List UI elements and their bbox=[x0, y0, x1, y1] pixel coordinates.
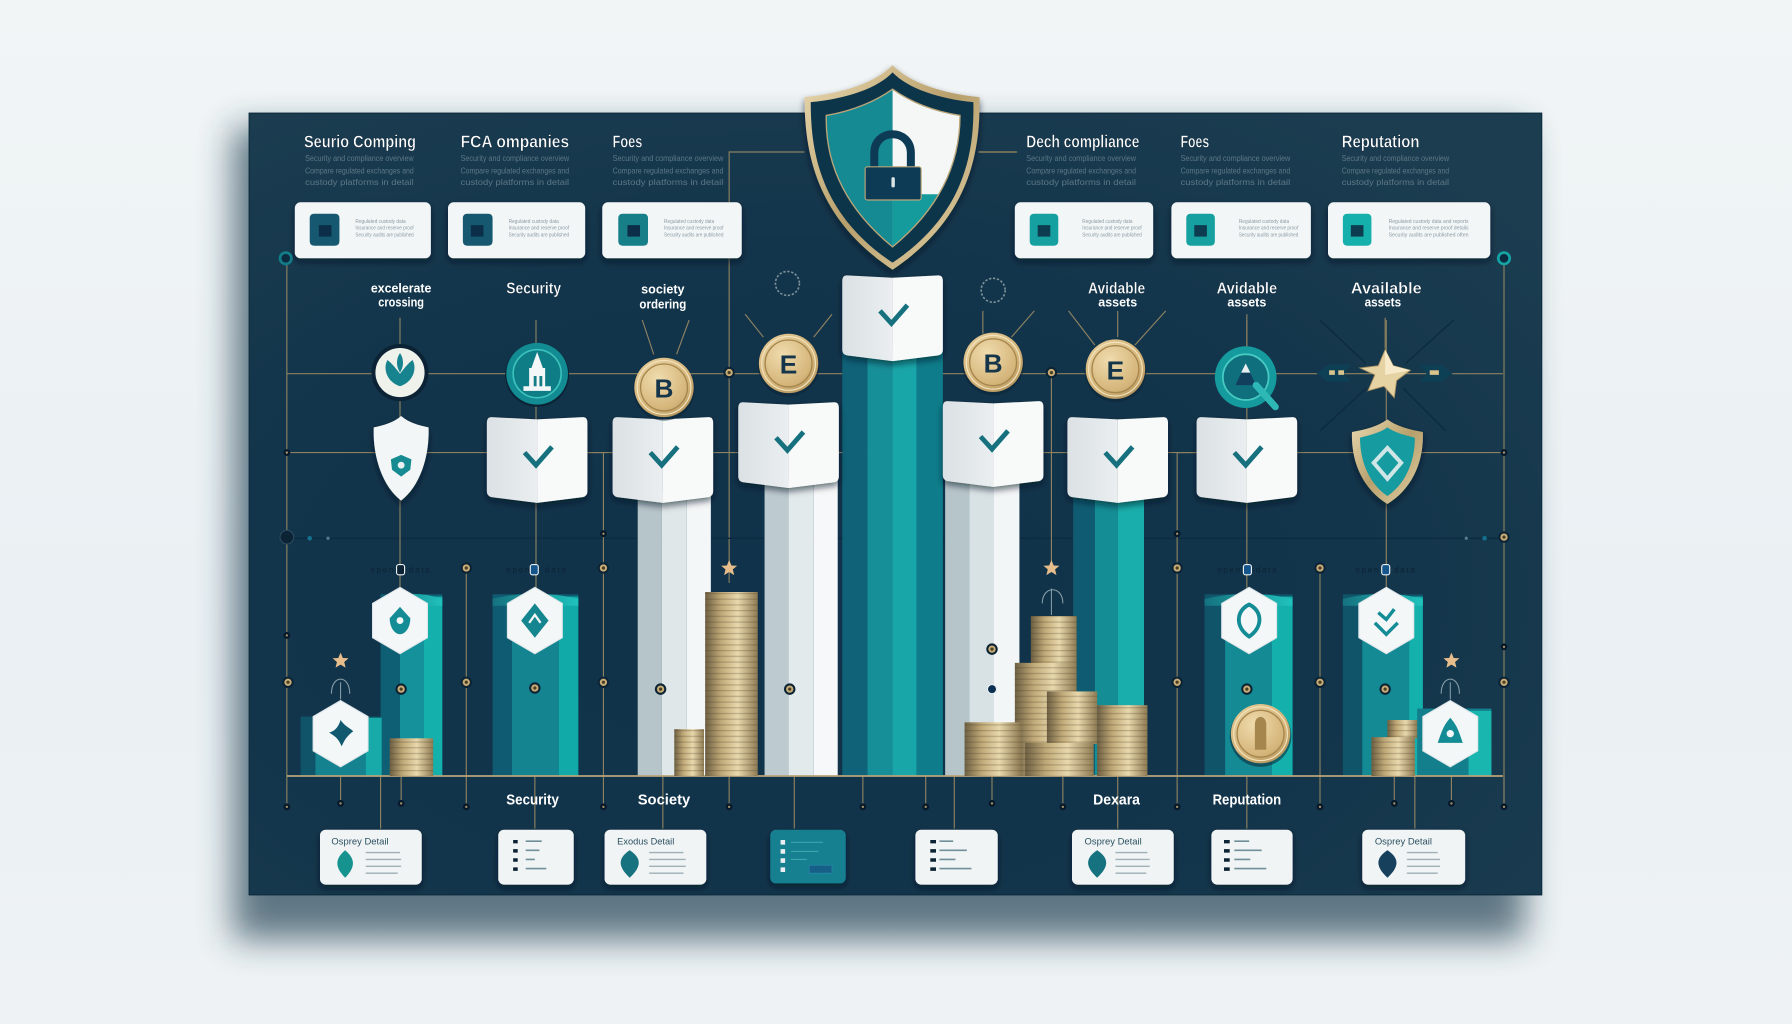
lower bar B bbox=[493, 594, 578, 776]
top card 6: Regulated custody data and reports bbox=[1389, 219, 1469, 225]
connector grid lines bbox=[287, 152, 1504, 829]
panel shadow bbox=[233, 128, 1525, 939]
coin stack A bbox=[390, 738, 433, 776]
icon: gold star bbox=[1360, 350, 1410, 398]
heading: Fees right: Security and compliance overview bbox=[1181, 153, 1291, 163]
top card 6: Security audits are published often bbox=[1389, 233, 1469, 239]
gold connector dots bbox=[282, 367, 1510, 695]
small bar right bbox=[1417, 709, 1491, 776]
bottom card 3: Exodus Detail bbox=[617, 837, 674, 847]
centre teal bar bbox=[842, 349, 943, 776]
heading: Seurio Comping: Seurio Comping bbox=[304, 131, 416, 151]
bottom card 4 teal bbox=[770, 830, 846, 883]
heading: Seurio Comping: custody platforms in detail bbox=[305, 177, 414, 187]
small bar left bbox=[301, 717, 382, 776]
check box 2 bbox=[613, 417, 713, 503]
heading: Fees left bbox=[613, 131, 724, 187]
top card 1: Security audits are published bbox=[355, 233, 414, 239]
icon: pound coin 2 bbox=[1085, 339, 1146, 402]
heading: Seurio Comping: Security and compliance overview bbox=[305, 153, 414, 163]
heading: Fees right: Foes bbox=[1181, 131, 1209, 151]
tiny tags above lower bars: open 0 data bbox=[370, 566, 430, 575]
lower bar C bbox=[1205, 594, 1293, 776]
tiny tags above lower bars: open 0 data bbox=[506, 566, 566, 575]
heading: Reputation: custody platforms in detail bbox=[1342, 177, 1449, 187]
hex badge small left bbox=[313, 701, 368, 767]
decorative ring left of centre bbox=[775, 271, 799, 295]
hook icons above small hexes bbox=[331, 589, 1459, 699]
top card 2: Insurance and reserve proof bbox=[509, 226, 570, 232]
top card 6: Insurance and reserve proof details bbox=[1389, 226, 1469, 232]
white bar 1 bbox=[638, 491, 711, 776]
heading: Deck compliance: Security and compliance overview bbox=[1026, 153, 1137, 163]
heading: Fees left: custody platforms in detail bbox=[613, 177, 724, 187]
bottom labels bbox=[506, 793, 1281, 809]
bottom labels: Reputation bbox=[1213, 793, 1281, 809]
heading: Reputation: Security and compliance overview bbox=[1342, 153, 1450, 163]
heading: FCA companies bbox=[461, 131, 570, 187]
icon: white shield left bbox=[374, 416, 429, 501]
bottom card 2 bbox=[498, 830, 574, 885]
bottom labels: Society bbox=[638, 793, 691, 809]
labels middle row: assets bbox=[1365, 295, 1401, 309]
top card 3 bbox=[602, 202, 742, 258]
top card 5: Insurance and reserve proof bbox=[1239, 226, 1299, 232]
heading: Fees left: Security and compliance overview bbox=[613, 153, 724, 163]
labels middle row: Security bbox=[506, 281, 561, 298]
icon: magnifier badge bbox=[1215, 346, 1277, 408]
right connector from shield bbox=[979, 151, 1017, 153]
bottom labels: Dexara bbox=[1093, 793, 1141, 809]
icon: bitcoin coin 2 bbox=[962, 333, 1024, 395]
bottom card 6: Osprey Detail bbox=[1085, 837, 1142, 847]
main dark panel bbox=[249, 113, 1542, 895]
labels middle row: Available bbox=[1351, 281, 1422, 298]
labels middle row: assets bbox=[1098, 295, 1137, 309]
top card 4: Regulated custody data bbox=[1082, 219, 1133, 225]
labels middle row bbox=[371, 281, 1422, 312]
lower bar A bbox=[381, 594, 442, 776]
bottom labels: Security bbox=[506, 793, 560, 809]
check box top centre bbox=[842, 275, 943, 361]
bottom card 5 bbox=[915, 830, 998, 885]
white bar 3 bbox=[945, 480, 1019, 776]
heading: Fees right: custody platforms in detail bbox=[1181, 177, 1290, 187]
heading: FCA companies: custody platforms in detail bbox=[461, 177, 569, 187]
coin stacks D bbox=[1371, 720, 1417, 776]
heading: Fees right bbox=[1181, 131, 1291, 187]
bottom card 3 bbox=[605, 830, 706, 885]
gold coin seal bbox=[1230, 704, 1291, 767]
heading: Fees left: Foes bbox=[613, 131, 642, 151]
labels middle row: excelerate bbox=[371, 282, 431, 296]
hex badge D bbox=[1359, 587, 1414, 654]
heading: Deck compliance: Compare regulated exchanges and bbox=[1026, 166, 1136, 176]
labels middle row: crossing bbox=[378, 295, 424, 309]
stars bbox=[333, 560, 1459, 668]
heading: Seurio Comping: Compare regulated exchanges and bbox=[305, 166, 414, 176]
heading: Deck compliance: Dech compliance bbox=[1026, 131, 1139, 151]
top card 4: Insurance and reserve proof bbox=[1082, 226, 1142, 232]
labels middle row: society bbox=[641, 283, 685, 297]
top card 4: Security audits are published bbox=[1082, 233, 1142, 239]
bottom card 8: Osprey Detail bbox=[1375, 837, 1432, 847]
icon: pound coin 1 bbox=[758, 334, 819, 397]
top card 2 bbox=[448, 202, 585, 258]
labels middle row: Avidable bbox=[1088, 281, 1145, 298]
hex badge A bbox=[373, 587, 427, 654]
heading: Fees left: Compare regulated exchanges and bbox=[613, 166, 724, 176]
check box 6 bbox=[1067, 417, 1168, 503]
top card 1: Insurance and reserve proof bbox=[355, 226, 414, 232]
labels middle row: Avidable bbox=[1217, 281, 1277, 298]
hex badge B bbox=[507, 587, 562, 654]
top card 1: Regulated custody data bbox=[355, 219, 406, 225]
icon: bitcoin coin 1: B bbox=[655, 374, 673, 404]
heading: Fees right: Compare regulated exchanges and bbox=[1181, 166, 1290, 176]
coin stacks B bbox=[674, 592, 758, 776]
top card 2: Security audits are published bbox=[509, 233, 569, 239]
lower bar D bbox=[1343, 594, 1423, 776]
bottom card 6 bbox=[1072, 830, 1174, 885]
top card 3: Regulated custody data bbox=[664, 219, 714, 225]
top card 5 bbox=[1171, 202, 1311, 258]
small dark dots bbox=[280, 449, 1507, 810]
tiny tags above lower bars: open 0 data bbox=[1217, 566, 1277, 575]
icon: gold shield right bbox=[1352, 419, 1423, 504]
coin stacks group C bbox=[965, 616, 1147, 776]
main shield emblem bbox=[805, 65, 980, 270]
top card 2: Regulated custody data bbox=[509, 219, 559, 225]
top card 6 bbox=[1328, 202, 1490, 258]
top card 3: Security audits are published bbox=[664, 233, 723, 239]
heading: Deck compliance: custody platforms in detail bbox=[1026, 177, 1136, 187]
check box 3 bbox=[738, 402, 839, 488]
heading: Reputation: Reputation bbox=[1342, 131, 1419, 151]
labels middle row: assets bbox=[1227, 295, 1266, 309]
check box 7 bbox=[1197, 417, 1297, 503]
tiny tags above lower bars bbox=[370, 565, 1415, 575]
teal bar right of white bbox=[1073, 491, 1144, 776]
icon: leaf badge bbox=[371, 344, 429, 401]
top card 1 bbox=[295, 202, 431, 258]
heading: FCA companies: FCA ompanies bbox=[461, 131, 569, 151]
icon: bitcoin coin 2: B bbox=[984, 349, 1003, 379]
heading: Deck compliance bbox=[1026, 131, 1139, 187]
top card 4 bbox=[1015, 202, 1153, 258]
top card 5: Regulated custody data bbox=[1239, 219, 1289, 225]
top card 3: Insurance and reserve proof bbox=[664, 226, 724, 232]
hex badge small right bbox=[1423, 701, 1478, 767]
bottom card 1 bbox=[320, 830, 422, 885]
corner node right bbox=[1498, 253, 1510, 264]
bottom card 8 bbox=[1362, 830, 1465, 885]
corner node left bbox=[280, 253, 291, 264]
bottom card 1: Osprey Detail bbox=[331, 837, 389, 847]
baseline highlight bbox=[287, 775, 1503, 777]
icon: bitcoin coin 1 bbox=[633, 358, 695, 421]
labels middle row: ordering bbox=[639, 298, 686, 312]
heading: FCA companies: Compare regulated exchanges and bbox=[461, 166, 569, 176]
icon: pound coin 1: E bbox=[780, 350, 797, 380]
white bar 2 bbox=[765, 480, 838, 776]
check box 1 bbox=[487, 417, 587, 503]
heading: Seurio Comping bbox=[304, 131, 416, 187]
bottom card 7 bbox=[1211, 830, 1293, 885]
heading: Reputation: Compare regulated exchanges and bbox=[1342, 166, 1449, 176]
tiny tags above lower bars: open 0 data bbox=[1355, 566, 1415, 575]
decorative ring right of centre bbox=[981, 278, 1005, 302]
hex badge C bbox=[1222, 587, 1277, 654]
icon: left gem on star line bbox=[1317, 365, 1351, 382]
heading: Reputation bbox=[1342, 131, 1450, 187]
heading: FCA companies: Security and compliance overview bbox=[461, 153, 570, 163]
icon: pound coin 2: E bbox=[1107, 355, 1124, 385]
top card 5: Security audits are published bbox=[1239, 233, 1298, 239]
icon: bank badge bbox=[505, 343, 569, 407]
check box 5 bbox=[943, 401, 1043, 487]
icon: right gem on star line bbox=[1419, 365, 1453, 382]
